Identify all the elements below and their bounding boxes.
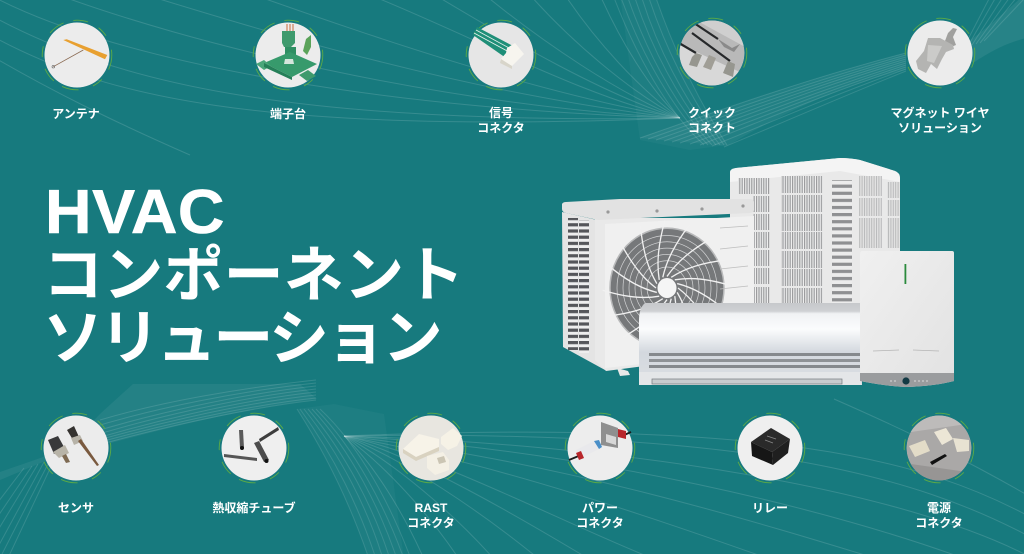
wall control panel (860, 251, 954, 387)
label: 信号 (489, 106, 513, 120)
label (407, 501, 455, 530)
back condenser unit (730, 158, 900, 310)
title: HVAC (45, 178, 225, 247)
indoor split unit (639, 303, 862, 385)
label: コネクタ (477, 120, 525, 134)
component: quick connect (676, 18, 748, 134)
label: コネクタ (576, 516, 624, 530)
label: アンテナ (52, 107, 100, 121)
component: power supply connector (904, 412, 974, 530)
label: 電源 (927, 501, 951, 515)
icon: sensors (40, 412, 112, 484)
component: relay (734, 412, 806, 515)
label: RAST (415, 501, 447, 515)
label: コネクタ (915, 516, 963, 530)
label: マグネット ワイヤ (890, 106, 989, 120)
front outdoor unit with fan (562, 199, 754, 376)
icon: terminal block (252, 20, 324, 90)
icon: magnet wire terminal (904, 18, 976, 88)
title (43, 178, 464, 372)
icon: power connectors (564, 412, 636, 484)
label: コネクト (688, 120, 736, 134)
label: パワー (582, 501, 618, 515)
component: magnet wire solution (890, 18, 989, 134)
component: RAST connector (396, 412, 466, 530)
icon: relay (734, 412, 806, 484)
label: ソリューション (898, 120, 982, 134)
title: コンポーネント (43, 242, 464, 309)
component: terminal block (252, 20, 324, 121)
label (576, 501, 624, 530)
icon: signal connector (466, 20, 536, 90)
icon: RAST connectors (396, 412, 466, 484)
icon: antenna (42, 20, 112, 90)
label: クイック (688, 106, 736, 120)
component: heat shrink tubing (212, 412, 296, 515)
label (915, 501, 963, 530)
title: ソリューション (43, 305, 439, 372)
label: 端子台 (270, 107, 306, 121)
icon: tubes (218, 412, 290, 484)
label: 熱収縮チューブ (212, 501, 296, 515)
component: power connector (564, 412, 636, 530)
label: リレー (752, 501, 788, 515)
label (890, 106, 989, 134)
component: antenna (42, 20, 112, 121)
component: signal connector (466, 20, 536, 134)
component: sensor (40, 412, 112, 515)
label (688, 106, 736, 134)
label: センサ (58, 501, 94, 515)
label: コネクタ (407, 516, 455, 530)
icon: power supply connector (904, 412, 974, 484)
label (477, 106, 525, 134)
icon: quick connect (676, 18, 748, 88)
